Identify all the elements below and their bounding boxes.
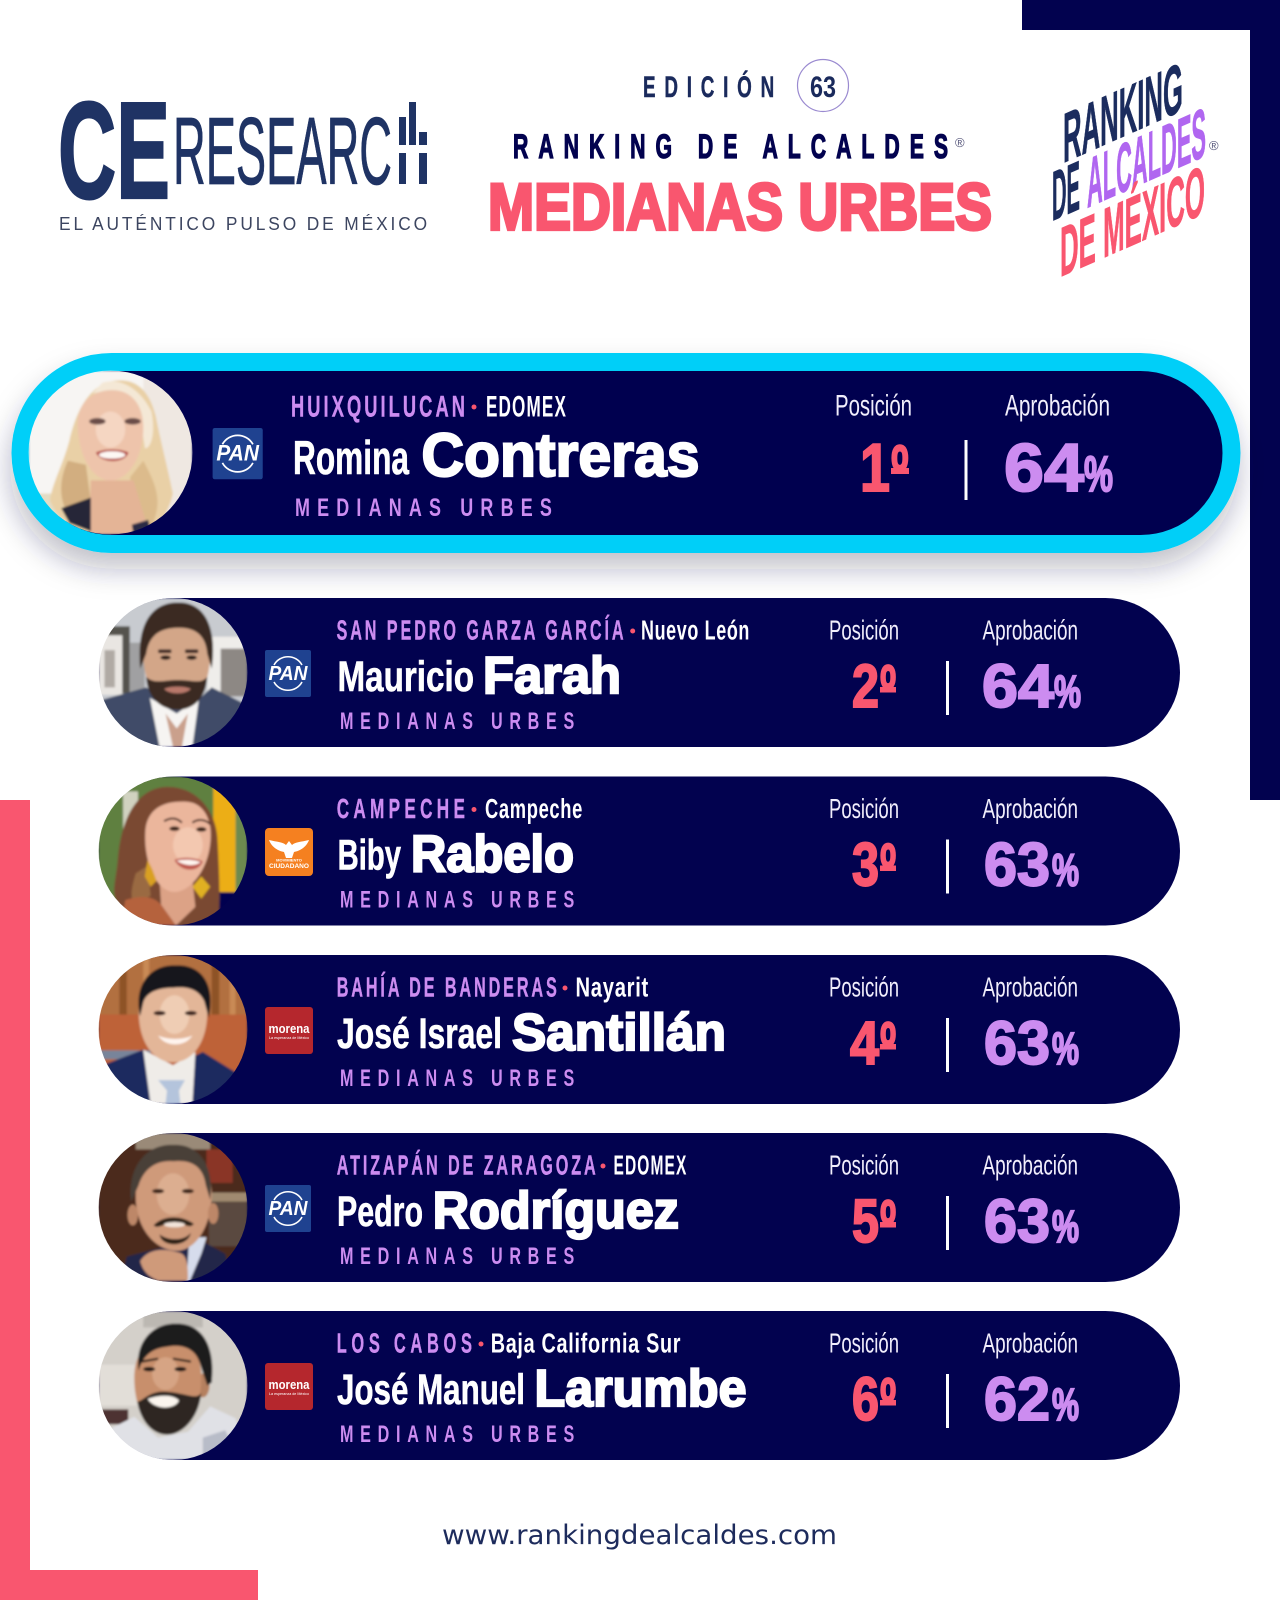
logo: Morena: morena (268, 1021, 310, 1036)
heading: ranking de alcaldes: RANKING DE ALCALDES (513, 128, 958, 166)
logo: ranking de alcaldes de mexico (1052, 47, 1219, 292)
name: Rodríguez (433, 1182, 679, 1240)
heading: edition (643, 60, 848, 112)
category: MEDIANAS URBES (340, 1065, 581, 1092)
location: Nayarit (576, 972, 649, 1002)
approval value: 62 (984, 1365, 1050, 1433)
heading: medianas urbes: MEDIANAS URBES (488, 170, 992, 244)
logo: PAN: PAN (268, 663, 308, 685)
logo: CE Research: RESEARC (173, 98, 392, 205)
position number: º (880, 1364, 896, 1442)
logo: Movimiento Ciudadano: CIUDADANO (269, 863, 309, 870)
name: Larumbe (534, 1360, 746, 1418)
footer url: www.rankingdealcaldes.com (442, 1520, 837, 1551)
approval value: 64 (982, 652, 1054, 720)
approval value: % (1052, 1023, 1079, 1074)
location: BAHÍA DE BANDERAS (337, 972, 560, 1002)
panel: rank 3 Biby Rabelo (98, 776, 1180, 926)
name (338, 826, 574, 884)
name: Pedro (337, 1188, 423, 1236)
position number: 6 (852, 1365, 879, 1433)
position number (852, 1186, 896, 1264)
position number (852, 651, 896, 729)
name (293, 421, 700, 489)
pill background (99, 955, 1180, 1104)
label: aprobacion: Aprobación (982, 793, 1078, 824)
panel: rank 4 Jose Israel Santillan (98, 955, 1180, 1104)
position number (860, 430, 909, 515)
logo: PAN (213, 428, 263, 479)
name: Biby (338, 832, 401, 880)
heading: edition: 63 (810, 71, 836, 104)
pill background (99, 776, 1180, 926)
position number: 3 (852, 830, 879, 898)
divider (946, 1374, 949, 1428)
position number: º (880, 1186, 896, 1264)
location: EDOMEX (614, 1150, 688, 1180)
logo: Movimiento Ciudadano: MOVIMIENTO (276, 858, 302, 862)
heading: ranking de alcaldes: ® (955, 135, 965, 150)
logo: PAN (265, 1185, 311, 1232)
position number (850, 1008, 896, 1086)
position number (852, 830, 896, 908)
panel: rank 1 Romina Contreras (20, 362, 1232, 544)
location: LOS CABOS (337, 1328, 477, 1358)
photo: Mauricio Farah (98, 598, 248, 747)
position number: º (891, 430, 908, 515)
label: posicion: Posición (829, 1328, 899, 1358)
pill background (99, 598, 1180, 747)
heading: ranking de alcaldes (513, 128, 965, 166)
logo: Morena: La esperanza de México (269, 1391, 310, 1396)
divider (946, 661, 949, 715)
name: Romina (293, 431, 410, 484)
position number: 2 (852, 652, 879, 720)
frame: pink corner bottom left (0, 800, 258, 1600)
approval value: 63 (984, 830, 1050, 898)
location: CAMPECHE (337, 793, 469, 824)
divider (946, 1018, 949, 1072)
name: Rabelo (411, 826, 574, 884)
name (337, 1360, 746, 1418)
position number: 5 (852, 1187, 879, 1255)
approval value: % (1052, 844, 1079, 896)
category: MEDIANAS URBES (340, 886, 581, 914)
approval value (982, 652, 1081, 720)
name (338, 647, 621, 705)
photo: Biby Rabelo (98, 776, 248, 926)
location: Nuevo León (641, 614, 750, 646)
logo: Morena (265, 1007, 313, 1054)
location: ATIZAPÁN DE ZARAGOZA (337, 1150, 599, 1180)
label: aprobacion: Aprobación (982, 1328, 1078, 1358)
frame: navy corner top right (1022, 0, 1280, 800)
photo: Pedro Rodriguez (98, 1133, 248, 1282)
location: EDOMEX (486, 390, 567, 424)
approval value: % (1052, 1201, 1079, 1252)
label: posicion: Posición (829, 1150, 899, 1180)
name: José Manuel (337, 1366, 525, 1414)
approval value: % (1052, 1379, 1079, 1430)
logo: ranking de alcaldes de mexico: ® (1209, 138, 1219, 153)
category: MEDIANAS URBES (340, 1421, 581, 1448)
label: posicion: Posición (835, 390, 912, 422)
position number (852, 1364, 896, 1442)
logo: PAN: PAN (268, 1198, 308, 1220)
name: Santillán (512, 1004, 726, 1062)
position number: 1 (860, 430, 890, 506)
photo: Jose Israel Santillan (98, 955, 248, 1104)
pill background (99, 1311, 1180, 1460)
logo: PAN: PAN (216, 441, 260, 466)
name: Contreras (422, 421, 700, 489)
approval value: 64 (1004, 430, 1084, 506)
position number: º (880, 830, 896, 908)
photo: Romina Contreras (28, 370, 192, 534)
label: aprobacion: Aprobación (982, 1150, 1078, 1180)
logo: PAN (265, 650, 311, 697)
location (337, 1328, 681, 1358)
approval value: % (1084, 446, 1113, 502)
position number: º (880, 651, 896, 729)
pill background with cyan border (20, 362, 1232, 544)
location: Campeche (485, 793, 583, 824)
name (337, 1004, 726, 1062)
logo: Morena (265, 1363, 313, 1410)
name: Mauricio (338, 653, 474, 701)
photo: Jose Manuel Larumbe (98, 1311, 248, 1460)
position number: º (880, 1008, 896, 1086)
label: aprobacion: Aprobación (1005, 390, 1110, 422)
position number: 4 (850, 1009, 879, 1077)
logo: CE Research: CE (58, 74, 170, 228)
category: MEDIANAS URBES (340, 1243, 581, 1270)
panel: rank 2 Mauricio Farah (98, 598, 1180, 747)
label: posicion: Posición (829, 614, 899, 646)
logo: Morena: La esperanza de México (269, 1035, 310, 1040)
label: aprobacion: Aprobación (982, 972, 1078, 1002)
approval value: % (1054, 666, 1081, 717)
logo: Morena: morena (268, 1377, 310, 1392)
panel: rank 5 Pedro Rodriguez (98, 1133, 1180, 1282)
approval value: 63 (984, 1187, 1050, 1255)
divider (964, 440, 968, 500)
logo: CE Research: EL AUTÉNTICO PULSO DE MÉXICO (59, 214, 430, 234)
panel: rank 6 Jose Manuel Larumbe (98, 1311, 1180, 1460)
approval value: 63 (984, 1009, 1050, 1077)
location: SAN PEDRO GARZA GARCÍA (336, 614, 626, 646)
logo: ranking de alcaldes de mexico: DE (1052, 146, 1080, 236)
label: posicion: Posición (829, 793, 899, 824)
approval value (1004, 430, 1113, 506)
logo: Movimiento Ciudadano (265, 828, 313, 876)
pill background (99, 1133, 1180, 1282)
name: José Israel (337, 1010, 502, 1058)
divider (946, 840, 949, 894)
category: MEDIANAS URBES (295, 494, 559, 522)
location: Baja California Sur (491, 1328, 681, 1358)
category: MEDIANAS URBES (340, 708, 581, 735)
name: Farah (483, 647, 621, 705)
divider (946, 1196, 949, 1250)
heading: edition: EDICIÓN (643, 70, 783, 104)
location: HUIXQUILUCAN (291, 390, 468, 424)
label: aprobacion: Aprobación (982, 614, 1078, 646)
logo: CE Research (58, 74, 430, 234)
label: posicion: Posición (829, 972, 899, 1002)
